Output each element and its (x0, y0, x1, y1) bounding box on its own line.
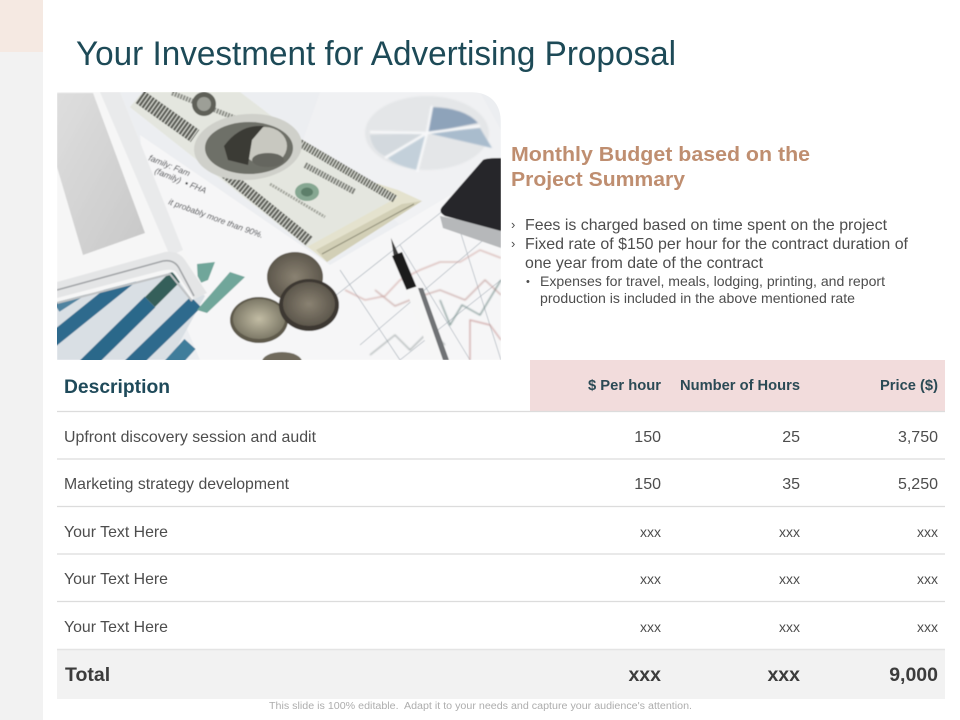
row: your text 2: xxx (917, 571, 938, 587)
sub-bullet: expenses: • (526, 276, 530, 288)
bullet: fixed rate: Fixed rate of $150 per hour for the contract duration of (525, 236, 909, 253)
table header: $ Per hour (588, 378, 661, 394)
row: total: 9,000 (889, 664, 938, 686)
row: upfront discovery (64, 429, 938, 446)
heading: monthly budget (511, 144, 810, 191)
paper sheet (140, 135, 501, 360)
row: your text 1 (64, 524, 938, 541)
row: total: xxx (628, 664, 661, 686)
row: your text 3: xxx (917, 619, 938, 635)
bullet list (511, 217, 909, 306)
table (57, 360, 945, 699)
bill border bands (140, 97, 195, 136)
grid lines (336, 212, 501, 360)
row: your text 1: Your Text Here (64, 524, 168, 541)
bullet: fees: Fees is charged based on time spent on the project (525, 217, 888, 234)
photo: money, coins and charts (50, 92, 501, 372)
row: marketing strategy (64, 476, 938, 493)
line charts (345, 250, 501, 360)
bullet: fixed rate: one year from date of the contract (525, 255, 764, 272)
row: marketing strategy: 150 (634, 476, 661, 493)
footer note: This slide is 100% editable. Adapt it to your needs and capture your audience's attention. (269, 701, 692, 712)
coins (230, 252, 339, 372)
heading: monthly budget: Monthly Budget based on the (511, 144, 810, 166)
row: your text 3: Your Text Here (64, 619, 168, 636)
row: your text 1: xxx (917, 524, 938, 540)
title: Your Investment for Advertising Proposal (76, 35, 676, 73)
sidebar (0, 0, 43, 720)
row: your text 3 (64, 619, 938, 636)
phone (440, 158, 501, 248)
sub-bullet: expenses: Expenses for travel, meals, lodging, printing, and report (540, 273, 885, 289)
row: marketing strategy: Marketing strategy development (64, 476, 290, 493)
row: upfront discovery: 25 (782, 429, 800, 446)
dollar bills (130, 92, 422, 262)
row: your text 3: xxx (779, 619, 800, 635)
row: your text 1: xxx (779, 524, 800, 540)
row: upfront discovery: Upfront discovery session and audit (64, 429, 317, 446)
row: your text 3: xxx (640, 619, 661, 635)
row: your text 2: xxx (779, 571, 800, 587)
row: total: xxx (767, 664, 800, 686)
row: marketing strategy: 5,250 (898, 476, 938, 493)
sub-bullet: expenses (526, 273, 885, 306)
row: upfront discovery: 3,750 (898, 429, 938, 446)
paper text: family: Fam (147, 153, 192, 178)
paper text: it probably more than 90%. (167, 196, 265, 240)
row: your text 1: xxx (640, 524, 661, 540)
blue bars (50, 262, 245, 366)
paper text (147, 153, 265, 240)
bullet: fixed rate: › (511, 236, 515, 251)
paper text: (family) ▪ FHA (153, 166, 208, 196)
heading: monthly budget: Project Summary (511, 169, 686, 191)
row: total (57, 649, 945, 699)
pen (391, 238, 449, 360)
table header: Number of Hours (680, 378, 800, 394)
sub-bullet: expenses: production is included in the above mentioned rate (540, 290, 855, 306)
table header (64, 360, 945, 411)
row: upfront discovery: 150 (634, 429, 661, 446)
pie chart (365, 96, 492, 172)
table header: Description (64, 377, 170, 398)
bullet: fees: › (511, 217, 515, 232)
calculator frame (57, 92, 207, 303)
row: marketing strategy: 35 (782, 476, 800, 493)
row: your text 2: Your Text Here (64, 571, 168, 588)
row: your text 2 (64, 571, 938, 588)
table header: Price ($) (880, 378, 938, 394)
row: your text 2: xxx (640, 571, 661, 587)
row: total: Total (65, 664, 110, 686)
bullet: fixed rate (511, 236, 909, 272)
